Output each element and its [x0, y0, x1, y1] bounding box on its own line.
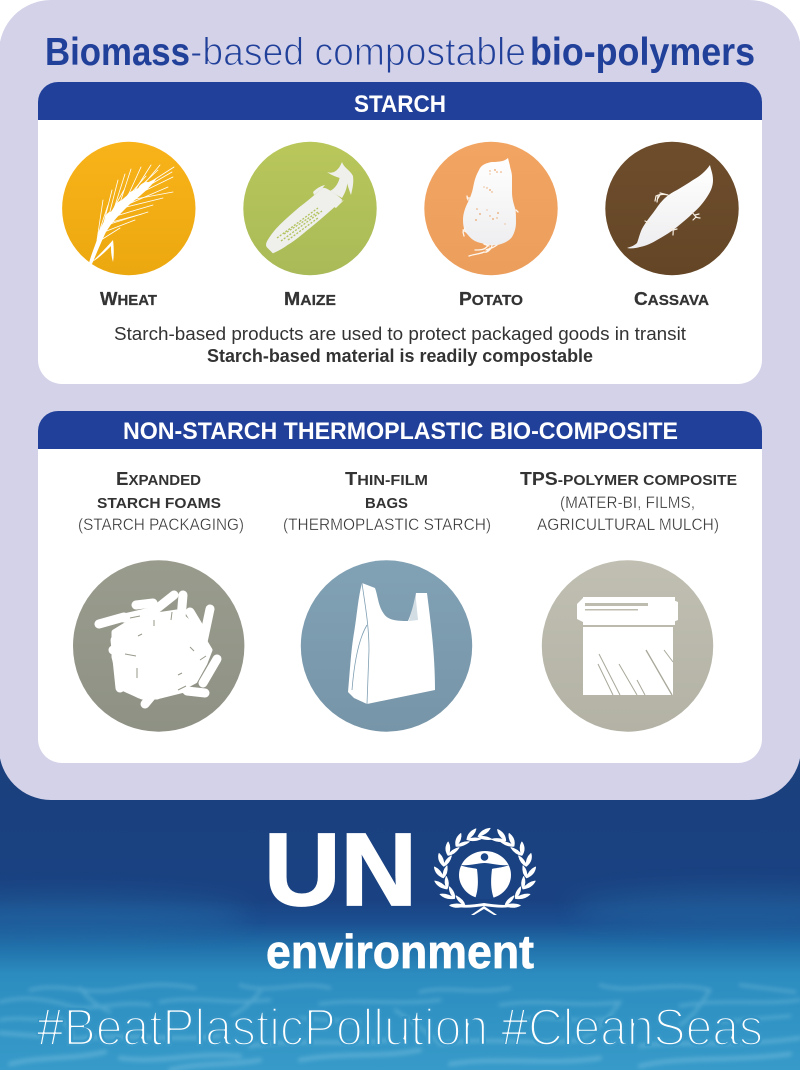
header: non-starch: [38, 411, 762, 449]
column text: thin-film bags: [283, 469, 491, 534]
logo wordmark: UN: UN: [264, 812, 417, 927]
icon: starch foam peanuts: [73, 560, 244, 732]
panel: starch: [38, 82, 762, 384]
icon: maize: [243, 142, 377, 275]
column text: thin-film bags: THIN-FILM: [345, 469, 428, 489]
icon: film roll: [542, 560, 713, 732]
title: [45, 31, 755, 74]
background: ocean water: [0, 740, 800, 1070]
panel: non-starch thermoplastic bio-composite: [38, 411, 762, 763]
column text: tps-polymer composite: TPS-POLYMER COMPOSITE: [520, 469, 737, 489]
hashtags: #BeatPlasticPollution #CleanSeas: [37, 999, 763, 1057]
header: starch: [38, 82, 762, 120]
column text: expanded starch foams: STARCH FOAMS: [97, 496, 221, 512]
label: potato: POTATO: [459, 289, 523, 309]
title: bio-polymers: [530, 31, 755, 74]
emblem: UN Environment wreath: [435, 828, 535, 915]
panel: lavender background: [0, 0, 800, 800]
logo wordmark: environment: environment: [266, 925, 534, 978]
column text: expanded starch foams: (STARCH PACKAGING): [78, 515, 244, 534]
text: starch description: Starch-based products are used to protect packaged goods in transit: [114, 324, 686, 344]
label: wheat: WHEAT: [100, 289, 157, 309]
label: cassava: CASSAVA: [634, 289, 710, 309]
column text: tps-polymer composite: AGRICULTURAL MULCH): [537, 515, 719, 534]
header: starch: STARCH: [354, 91, 446, 118]
icon: cassava: [605, 142, 739, 275]
column text: expanded starch foams: EXPANDED: [116, 469, 201, 489]
logo: UN Environment: [264, 812, 535, 978]
title: Biomass: [45, 31, 190, 74]
column text: expanded starch foams: [78, 469, 244, 534]
text: starch compostable: Starch-based material is readily compostable: [207, 346, 593, 366]
column text: thin-film bags: BAGS: [365, 496, 408, 512]
icon: wheat: [62, 142, 196, 275]
title: -based compostable: [190, 31, 526, 74]
header: non-starch: NON-STARCH THERMOPLASTIC BIO-COMPOSITE: [123, 418, 678, 445]
column text: tps-polymer composite: (MATER-BI, FILMS,: [560, 493, 695, 512]
label: maize: MAIZE: [284, 289, 336, 309]
icon: potato: [424, 142, 558, 275]
icon: plastic bag: [301, 560, 472, 732]
column text: tps-polymer composite: [520, 469, 737, 534]
column text: thin-film bags: (THERMOPLASTIC STARCH): [283, 515, 491, 534]
